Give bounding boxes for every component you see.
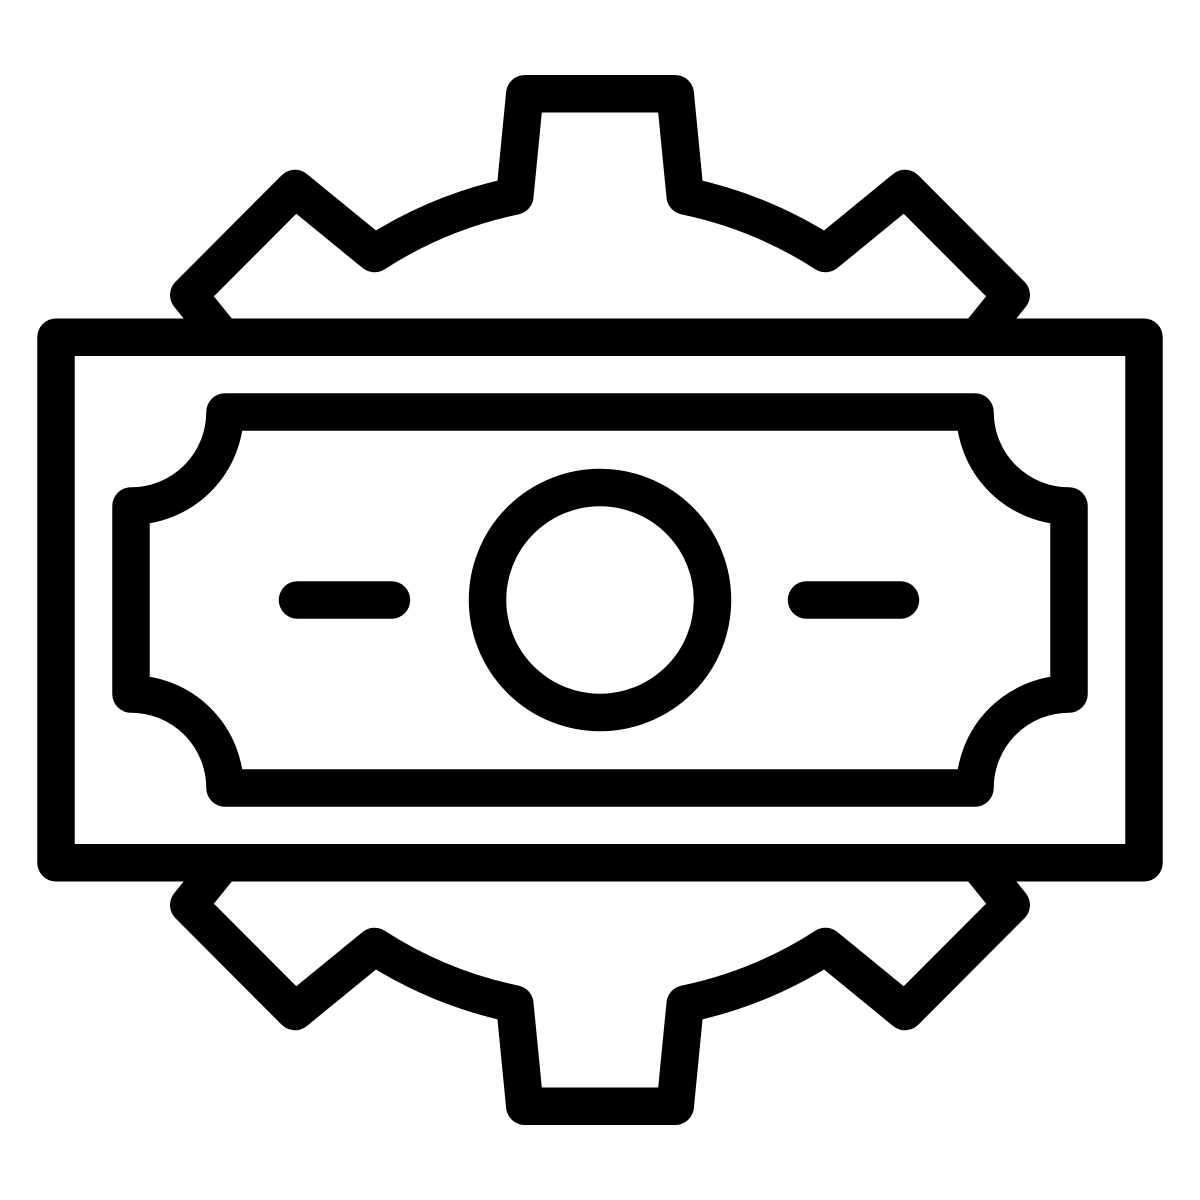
icon: gear bottom half — [189, 870, 1011, 1106]
left dash — [298, 581, 392, 619]
icon: gear top half — [189, 94, 1011, 330]
right dash — [806, 581, 900, 619]
outer banknote rectangle — [56, 337, 1144, 863]
center coin circle — [488, 488, 712, 712]
inner banknote frame — [131, 412, 1069, 788]
